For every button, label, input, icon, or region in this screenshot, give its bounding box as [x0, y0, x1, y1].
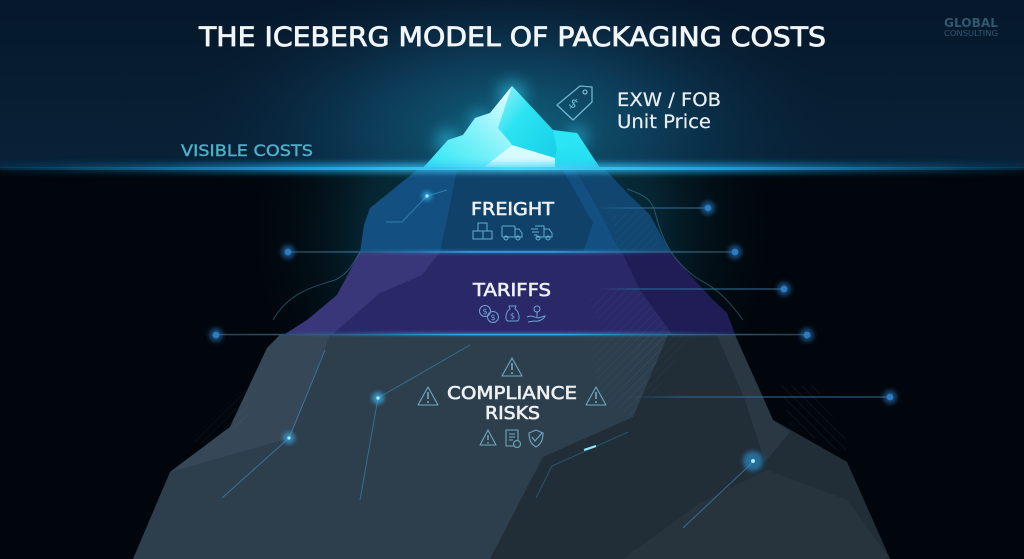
label: visible costs: VISIBLE COSTS [181, 141, 313, 160]
icon: warning right [586, 387, 606, 405]
icons: tariffs [480, 306, 545, 322]
label: compliance risks: RISKS [485, 404, 540, 424]
icon: coins: $ [482, 307, 488, 316]
icon: coins [480, 306, 498, 322]
icon: hand with coin [527, 306, 545, 322]
background: sky above waterline [0, 0, 1024, 168]
icon: coins: $ [490, 313, 496, 322]
submerged iceberg [133, 170, 890, 559]
background: deep water below waterline [0, 168, 1024, 559]
callout: compliance risks [622, 390, 897, 404]
layer: tariffs band [285, 252, 735, 334]
icon: price tag: $ [565, 96, 581, 113]
icon: price tag [557, 86, 592, 120]
icon: fast truck [531, 226, 552, 240]
logo: Global Consulting: GLOBAL [944, 16, 998, 30]
crack highlights with sparks [222, 190, 763, 528]
logo: Global Consulting [944, 16, 998, 38]
icons: freight [473, 223, 552, 240]
icon: boxes [473, 223, 492, 239]
spark: lower right crack [683, 451, 763, 528]
tariffs / compliance divider with callouts [209, 328, 814, 342]
title: THE ICEBERG MODEL OF PACKAGING COSTS [198, 22, 826, 53]
icon: warning [480, 430, 496, 445]
spark: lower left crack [222, 350, 325, 498]
label: freight: FREIGHT [471, 200, 554, 220]
callout: tariffs [596, 282, 791, 296]
contour lines around iceberg [273, 189, 743, 320]
label: EXW / FOB unit price: Unit Price [617, 112, 711, 133]
icon: truck [502, 226, 522, 240]
iceberg tip above water [423, 86, 600, 168]
callout: freight [598, 201, 715, 215]
icon: shield check [529, 430, 543, 447]
icons: compliance [480, 430, 543, 448]
label: EXW / FOB unit price: EXW / FOB [617, 90, 721, 111]
layer: compliance risks band [133, 335, 890, 559]
icon: money bag: $ [510, 312, 515, 320]
iceberg tip glow [436, 81, 587, 154]
waterline [0, 163, 1024, 173]
label: EXW / FOB unit price [617, 90, 721, 133]
icon: warning top [502, 358, 522, 376]
label: compliance risks [447, 384, 577, 424]
layer: freight band [360, 170, 670, 252]
label: compliance risks: COMPLIANCE [447, 384, 577, 404]
hatch decorations outside iceberg [190, 385, 846, 455]
freight / tariffs divider with callouts [281, 245, 742, 259]
icon: warning left [418, 387, 438, 405]
spark: centre right crack [536, 432, 628, 498]
logo: Global Consulting: CONSULTING [944, 29, 998, 38]
spark: freight crack [386, 190, 447, 222]
label: tariffs: TARIFFS [472, 281, 551, 301]
icon: document check [506, 430, 520, 448]
spark: centre left crack [360, 345, 470, 500]
